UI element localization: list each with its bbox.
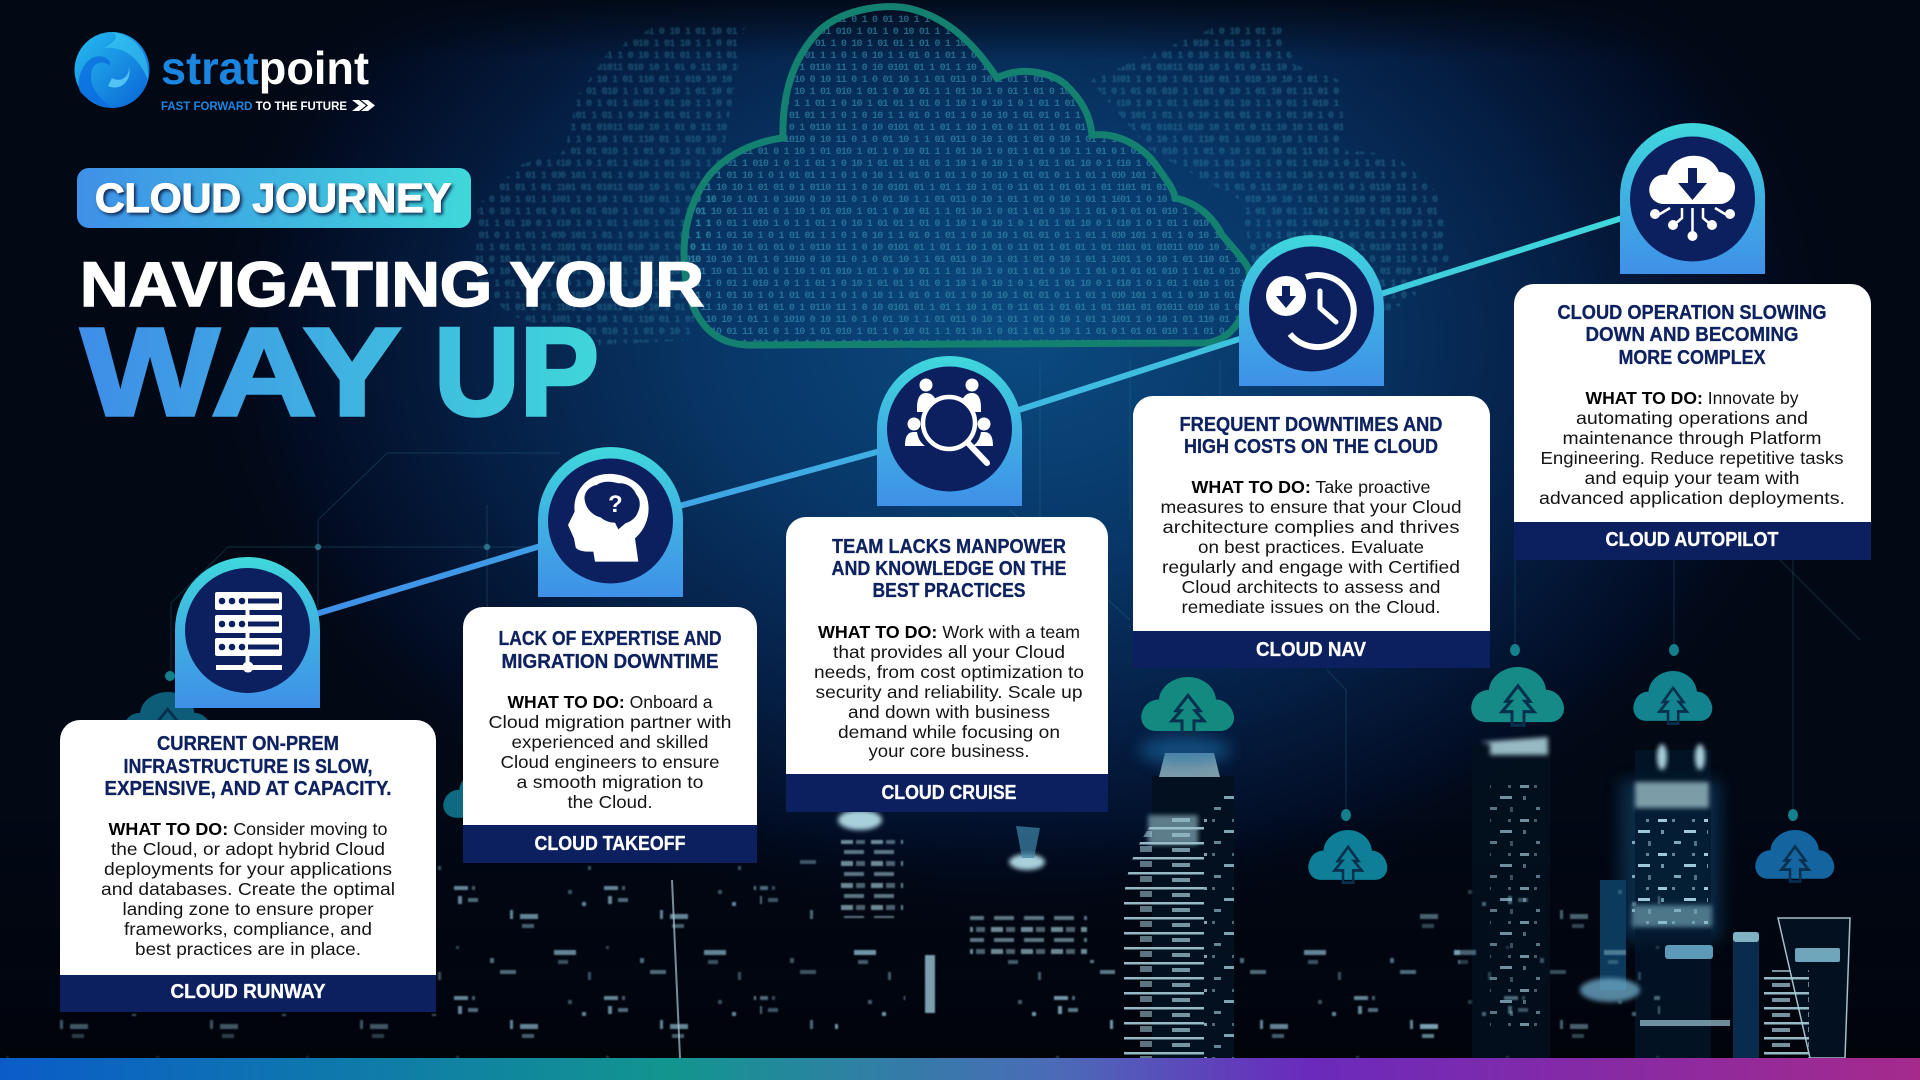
card 3: demand while focusing on — [838, 722, 1060, 742]
card 2: the Cloud. — [568, 792, 652, 812]
badge: cloud journey — [77, 168, 471, 228]
cloud 5 — [1755, 830, 1834, 882]
tower centre — [1472, 737, 1550, 1058]
card 1: best practices are in place. — [135, 939, 361, 959]
card 2: CLOUD TAKEOFF — [534, 833, 686, 855]
card 5: advanced application deployments. — [1539, 488, 1845, 508]
title — [80, 250, 704, 442]
card 4: WHAT TO DO: Take proactive — [1192, 477, 1430, 497]
card 1 — [60, 720, 436, 1012]
step 3: cloud cruise — [786, 356, 1108, 812]
card 4 — [1133, 396, 1490, 668]
background: binary clouds — [475, 25, 1450, 345]
cloud 1 — [1141, 677, 1234, 734]
card 4: remediate issues on the Cloud. — [1182, 597, 1440, 617]
tower left — [1124, 736, 1234, 1058]
card 5: CLOUD OPERATION SLOWING — [1558, 302, 1826, 324]
mid city windows — [0, 840, 1115, 1058]
card 4: FREQUENT DOWNTIMES AND — [1180, 414, 1442, 436]
card 1: CURRENT ON-PREM — [157, 733, 339, 755]
background: circuit lines — [171, 360, 1860, 815]
icon: swirl — [74, 32, 150, 108]
card 5: maintenance through Platform — [1562, 428, 1822, 448]
cloud 4 — [1633, 671, 1712, 724]
bubble 3 — [877, 356, 1022, 506]
card 2: a smooth migration to — [516, 772, 704, 792]
card 2 — [463, 607, 757, 863]
card 4: Cloud architects to assess and — [1182, 577, 1440, 597]
card 1: deployments for your applications — [104, 859, 392, 879]
card 4: on best practices. Evaluate — [1198, 537, 1424, 557]
card 5: and equip your team with — [1584, 468, 1800, 488]
card 4: CLOUD NAV — [1256, 639, 1367, 661]
card 1: CLOUD RUNWAY — [170, 981, 326, 1003]
icon: head with question mark: ? — [608, 491, 623, 518]
card 3: AND KNOWLEDGE ON THE — [832, 558, 1066, 580]
card 2: Cloud migration partner with — [488, 712, 732, 732]
cloud 3 — [1471, 667, 1564, 725]
tower right — [1580, 744, 1730, 1060]
cloud mid — [443, 770, 527, 820]
card 2: MIGRATION DOWNTIME — [502, 651, 718, 673]
card 1: landing zone to ensure proper — [122, 899, 374, 919]
card 2: Cloud engineers to ensure — [500, 752, 720, 772]
tower far right — [1240, 890, 1850, 1058]
card 3: that provides all your Cloud — [833, 642, 1065, 662]
card 3: TEAM LACKS MANPOWER — [832, 536, 1067, 558]
card 4: architecture complies and thrives — [1162, 517, 1460, 537]
card 2: experienced and skilled — [512, 732, 708, 752]
card 3 — [786, 517, 1108, 812]
icon: team and magnifier — [905, 378, 993, 463]
card 1: the Cloud, or adopt hybrid Cloud — [111, 839, 385, 859]
step 1: cloud runway — [60, 557, 436, 1012]
bubble 4 — [1239, 235, 1384, 386]
icon: clock with down arrow — [1266, 275, 1354, 347]
bubble 5 — [1620, 123, 1765, 274]
wordmark: stratpoint — [161, 42, 369, 94]
card 3: needs, from cost optimization to — [814, 662, 1084, 682]
card 1: INFRASTRUCTURE IS SLOW, — [124, 756, 372, 778]
logo — [74, 32, 375, 113]
card 5: MORE COMPLEX — [1618, 347, 1766, 369]
title line 1: NAVIGATING YOUR — [80, 250, 704, 320]
bottom gradient strip — [0, 1058, 1920, 1080]
city skyline — [0, 736, 1920, 1060]
bubble 2 — [538, 447, 683, 597]
card 4: regularly and engage with Certified — [1162, 557, 1460, 577]
tagline: FAST FORWARD TO THE FUTURE — [161, 99, 347, 113]
title line 2: WAY — [81, 303, 401, 442]
card 3: CLOUD CRUISE — [882, 782, 1016, 804]
card 5: WHAT TO DO: Innovate by — [1586, 388, 1799, 408]
pins — [165, 644, 1798, 821]
card 5: DOWN AND BECOMING — [1586, 324, 1798, 346]
step 2: cloud takeoff — [463, 447, 757, 863]
bubble 1 — [175, 557, 320, 708]
icon: server — [215, 592, 282, 672]
card 4: measures to ensure that your Cloud — [1160, 497, 1462, 517]
small upload clouds — [123, 644, 1834, 883]
step 4: cloud nav — [1133, 235, 1490, 668]
card 1: frameworks, compliance, and — [124, 919, 372, 939]
card 3: your core business. — [868, 741, 1030, 761]
cloud 2 — [1308, 830, 1387, 883]
card 3: WHAT TO DO: Work with a team — [818, 622, 1080, 642]
card 5: automating operations and — [1576, 408, 1808, 428]
card 3: security and reliability. Scale up — [816, 682, 1082, 702]
card 3: and down with business — [848, 702, 1050, 722]
badge: cloud journey: CLOUD JOURNEY — [95, 175, 451, 221]
main cloud outline with binary fill — [684, 7, 1249, 345]
icon: head with question mark — [568, 474, 649, 562]
card 1: and databases. Create the optimal — [101, 879, 395, 899]
lit building tops — [672, 810, 1045, 1058]
cloud left — [123, 692, 211, 745]
title line 2: UP — [434, 303, 599, 442]
title line 2 — [81, 303, 599, 442]
step 5: cloud autopilot — [1514, 123, 1871, 560]
journey line — [250, 196, 1692, 634]
card 2: WHAT TO DO: Onboard a — [508, 692, 713, 712]
card 1: WHAT TO DO: Consider moving to — [108, 819, 388, 839]
card 5 — [1514, 284, 1871, 560]
card 5: CLOUD AUTOPILOT — [1606, 529, 1778, 551]
card 5: Engineering. Reduce repetitive tasks — [1540, 448, 1844, 468]
card 4: HIGH COSTS ON THE CLOUD — [1184, 436, 1438, 458]
icon: chevrons — [352, 100, 375, 111]
card 1: EXPENSIVE, AND AT CAPACITY. — [104, 778, 392, 800]
icon: cloud with circuit — [1649, 156, 1735, 241]
card 3: BEST PRACTICES — [872, 580, 1026, 602]
card 2: LACK OF EXPERTISE AND — [498, 628, 722, 650]
